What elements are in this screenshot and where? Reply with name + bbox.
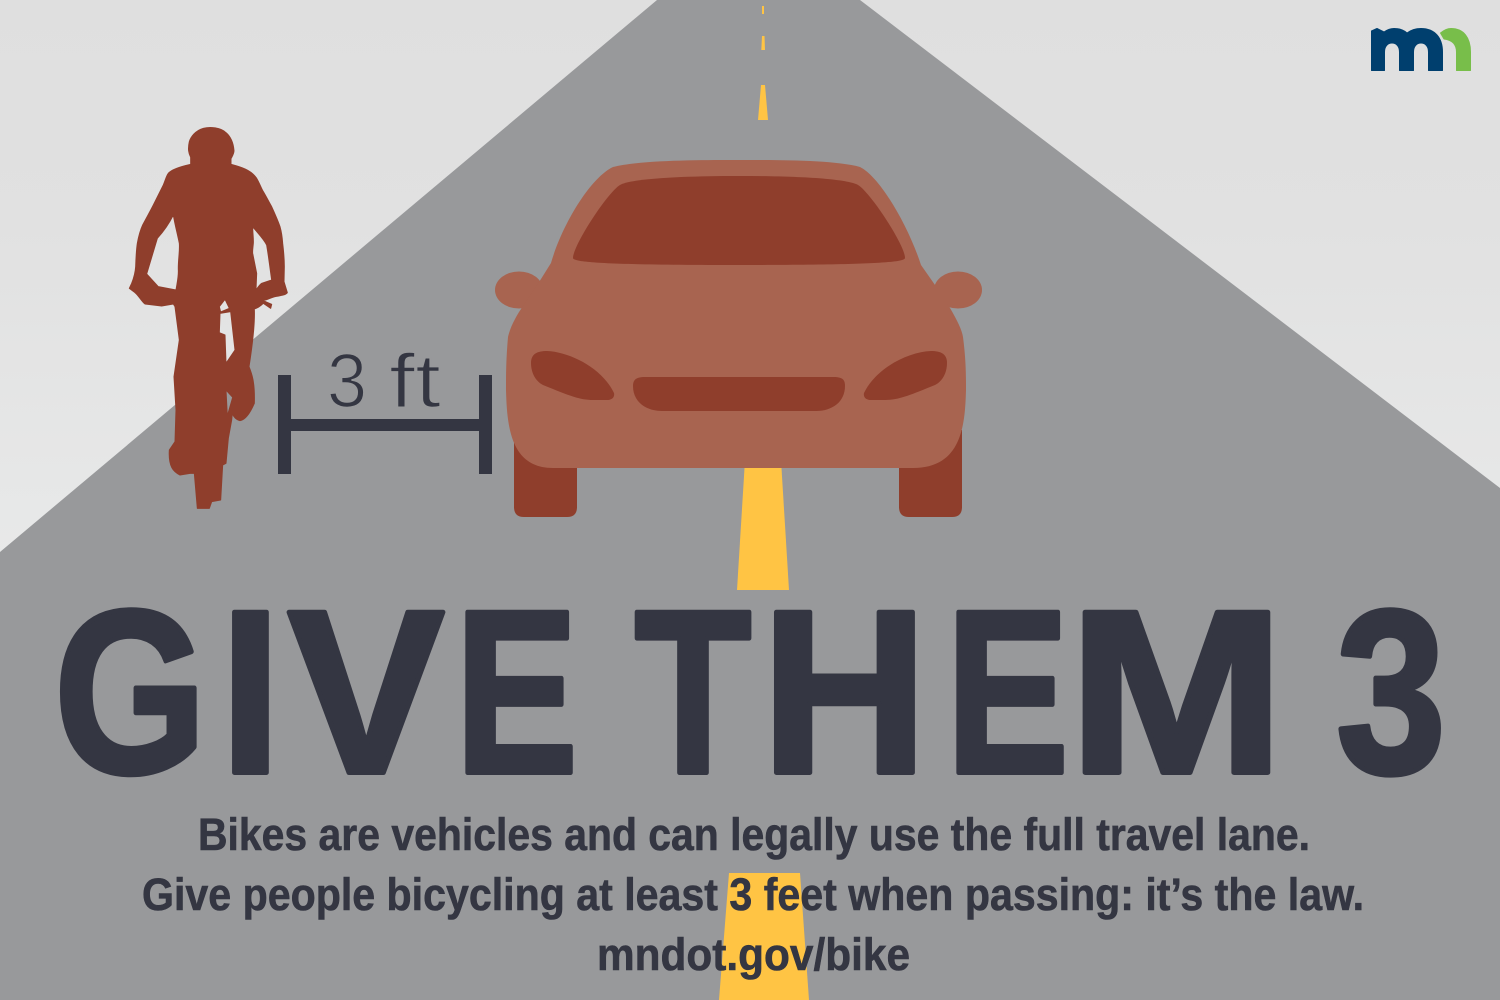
title: T	[635, 562, 751, 822]
car windshield	[573, 176, 905, 265]
car body	[495, 160, 982, 468]
title: E	[946, 562, 1069, 822]
3 ft label: 3	[327, 339, 367, 424]
car wheels	[514, 430, 962, 517]
icon: cyclist	[129, 128, 287, 508]
car grille	[633, 377, 845, 411]
body text: mndot.gov/bike	[597, 929, 910, 980]
title: G	[54, 562, 207, 822]
body text: Give people bicycling at least 3 feet when passing: it’s the law.	[142, 869, 1364, 920]
title: 3	[1336, 562, 1446, 822]
title: E	[455, 562, 578, 822]
road centre line	[719, 6, 809, 1000]
car right headlight	[864, 351, 947, 400]
logo: mn	[1372, 28, 1470, 70]
body text: Bikes are vehicles and can legally use the full travel lane.	[198, 809, 1310, 860]
title: I	[220, 562, 281, 822]
icon: 3 ft measure bracket	[278, 375, 492, 474]
car left headlight	[531, 351, 614, 400]
3 ft label: ft	[389, 339, 441, 424]
body text	[142, 809, 1364, 980]
title: M	[1068, 562, 1285, 822]
icon: car	[495, 160, 982, 517]
title: H	[761, 562, 928, 822]
title: V	[288, 562, 444, 822]
